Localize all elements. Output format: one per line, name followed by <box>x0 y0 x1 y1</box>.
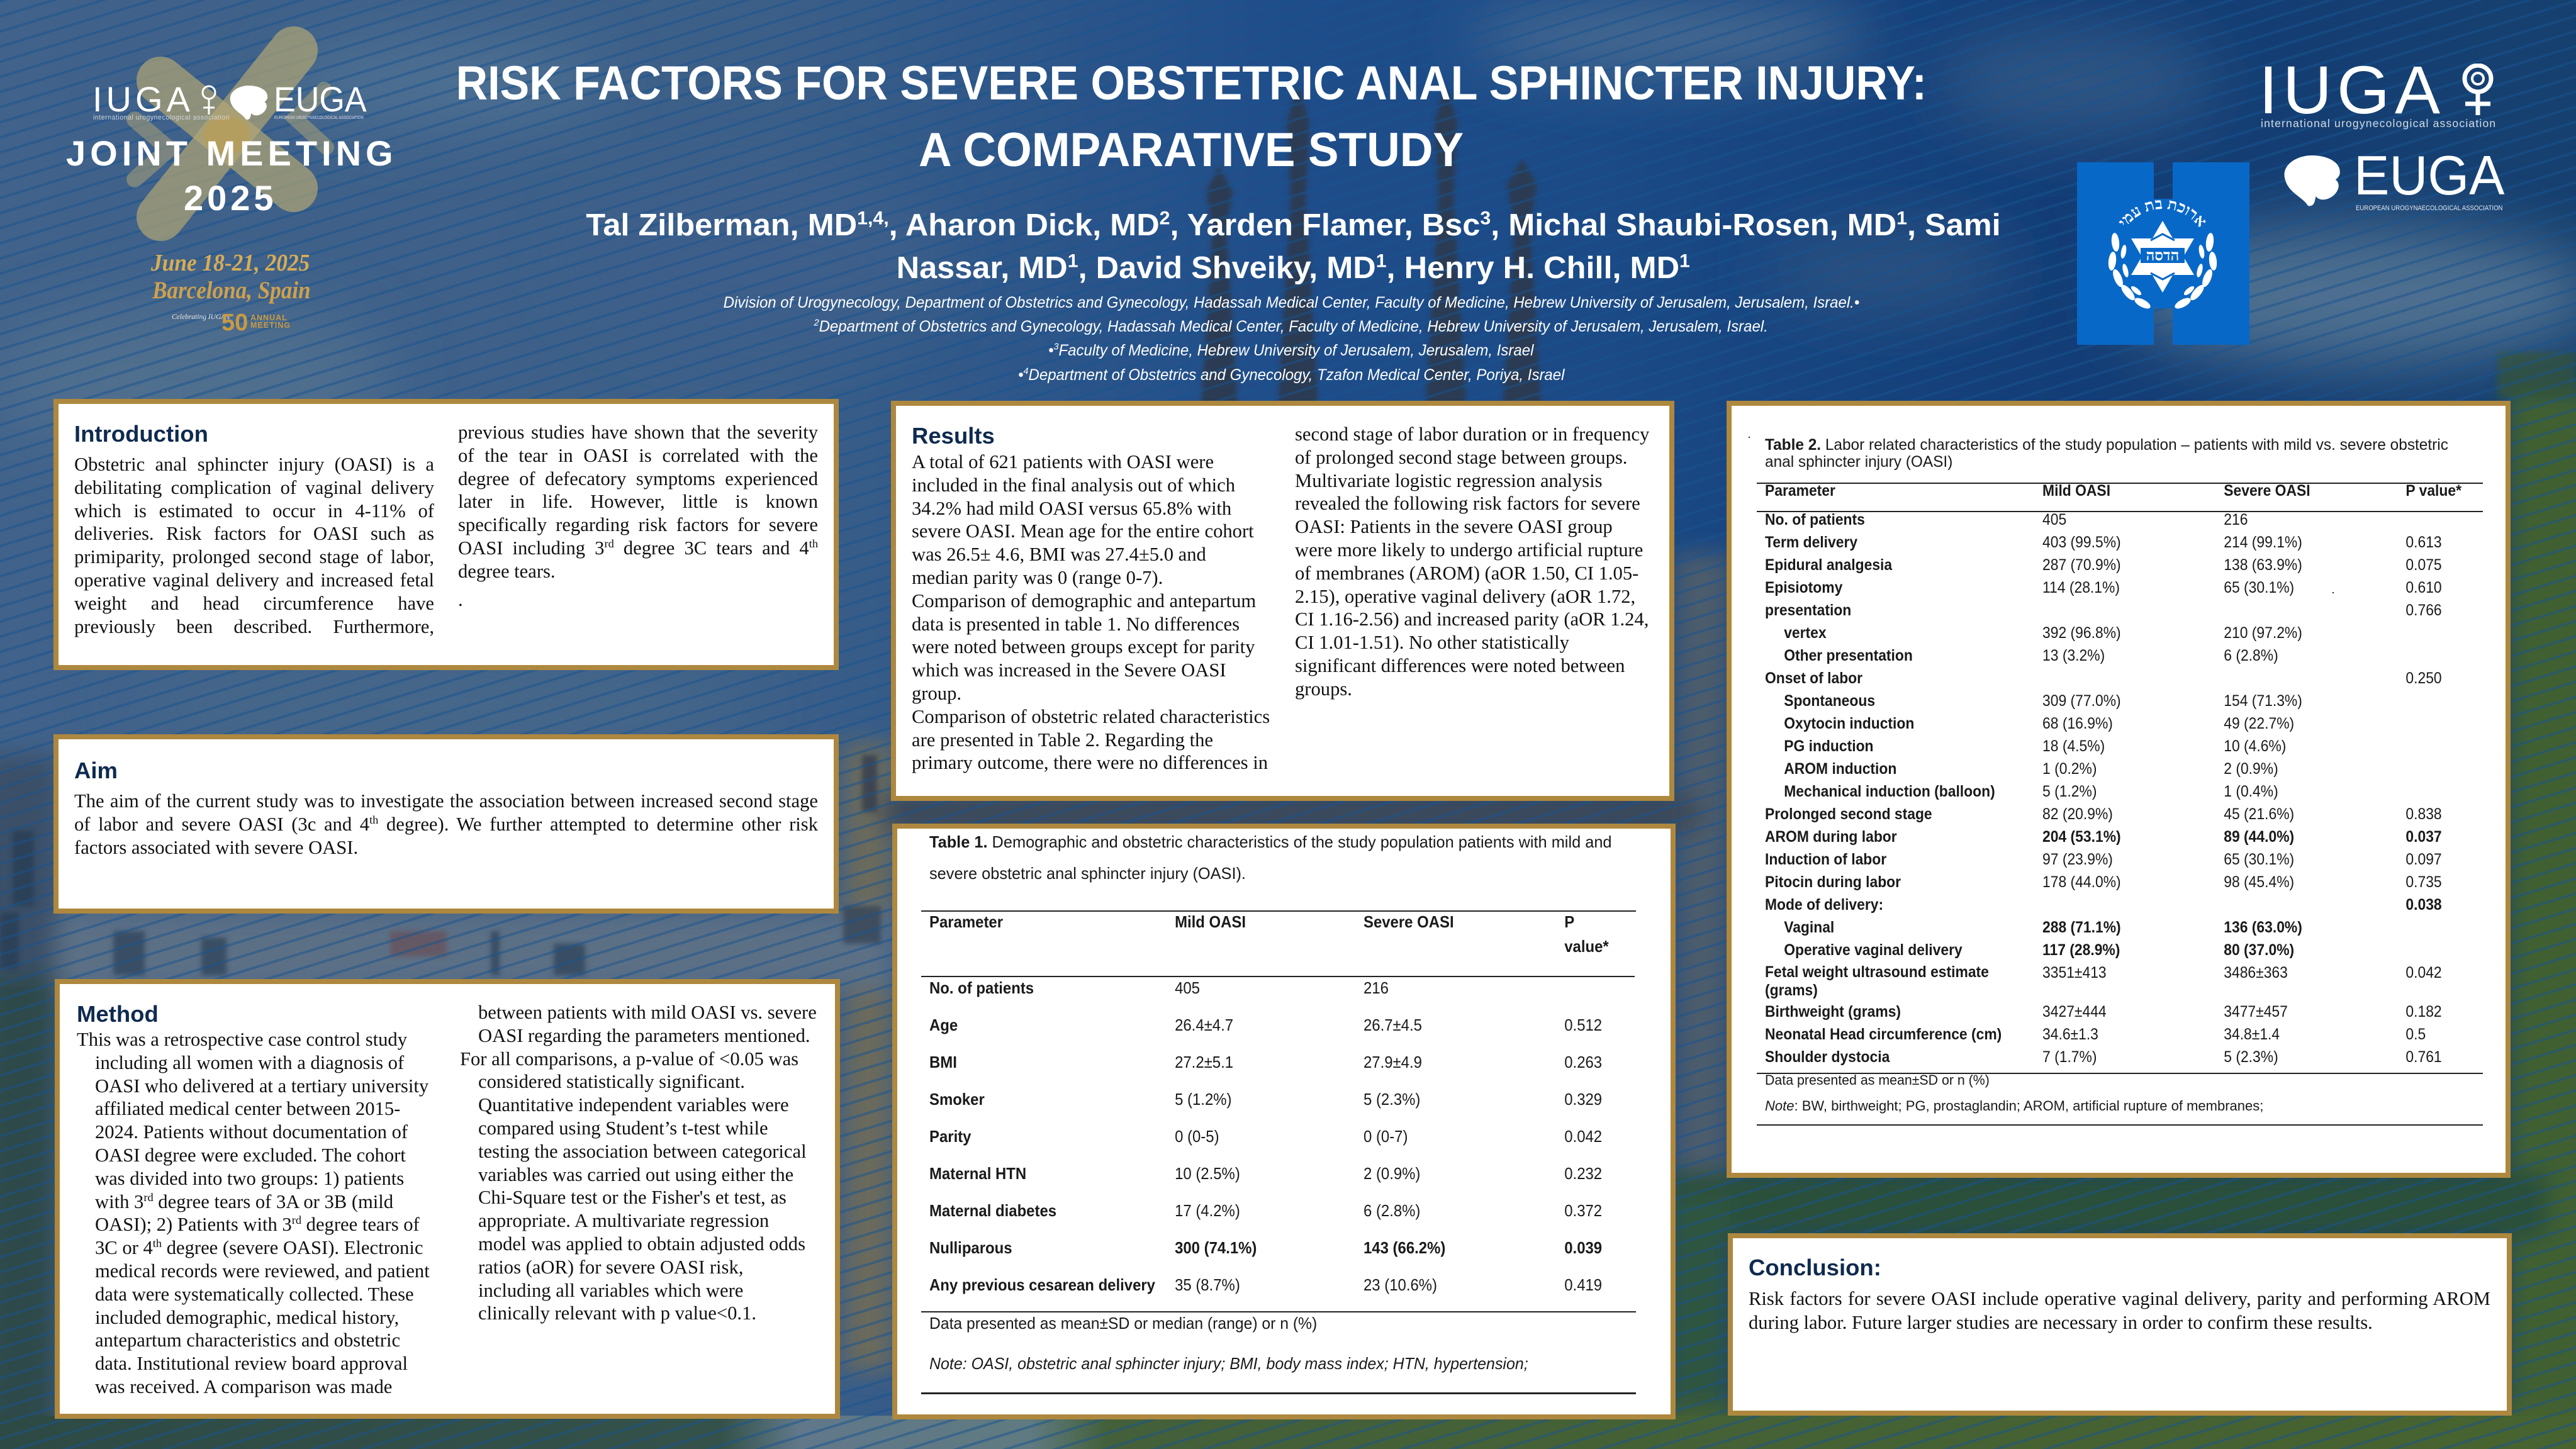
table 2 data: AROM during labor <box>1765 828 1897 846</box>
text: results column 2: CI 1.16-2.56) and increased parity (aOR 1.24, <box>1295 608 1649 630</box>
text: introduction column 2: degree of defecatory symptoms experienced <box>458 468 818 490</box>
table 2 data: 98 (45.4%) <box>2224 873 2294 891</box>
lower buildings and greenery <box>0 390 2576 1449</box>
logo: IUGA EUGA joint meeting <box>66 26 398 336</box>
table 2 data: P value* <box>2405 482 2461 500</box>
affiliations: Division of Urogynecology, Department of Obstetrics and Gynecology, Hadassah Medical Center, Faculty of Medicine, Hebrew University of Jerusalem, Jerusalem, Israel.• <box>723 294 1859 311</box>
table 2 data <box>1765 479 2486 1068</box>
table 2 data: 0.735 <box>2405 873 2442 891</box>
text: introduction column 1: operative vaginal delivery and increased fetal <box>74 569 434 591</box>
table 2 data: 0.182 <box>2405 1003 2442 1021</box>
table 1 data note: Data presented as mean±SD or median (range) or n (%) <box>929 1314 1317 1333</box>
table 1 data: 0 (0-5) <box>1175 1127 1219 1146</box>
text: results column 1 <box>912 450 1277 775</box>
table 2 data: 3477±457 <box>2224 1003 2288 1021</box>
text: aim: factors associated with severe OASI. <box>74 837 358 858</box>
text: introduction column 2: degree tears. <box>458 561 556 582</box>
table 1 data: Parameter <box>929 912 1003 931</box>
text: method column 1: 2024. Patients without documentation of <box>95 1121 408 1143</box>
icon: EUGA organ blob <box>230 86 268 120</box>
table 1 data: Nulliparous <box>929 1238 1012 1257</box>
text: aim <box>74 790 818 859</box>
50 mark: 50 <box>221 310 248 336</box>
table 2 data: 34.8±1.4 <box>2224 1026 2280 1043</box>
table 2 data: No. of patients <box>1765 511 1865 529</box>
icon: venus symbol small <box>201 86 216 115</box>
logo caption: international urogynecological association: international urogynecological association <box>93 114 230 121</box>
text: results column 1: primary outcome, there were no differences in <box>912 752 1268 773</box>
table 2 data: Mode of delivery: <box>1765 896 1883 914</box>
table 2 data: 405 <box>2042 511 2066 529</box>
affiliations: 2Department of Obstetrics and Gynecology, Hadassah Medical Center, Faculty of Medicine, Hebrew University of Jerusalem, Jerusalem, Israel. <box>814 318 1768 335</box>
table 2 data: 82 (20.9%) <box>2042 805 2113 823</box>
table 1 data: P <box>1564 912 1574 931</box>
table 2 data: 216 <box>2224 511 2248 529</box>
table 1 data: Age <box>929 1015 958 1034</box>
table 2 data: Fetal weight ultrasound estimate <box>1765 963 1989 981</box>
table 2 data: Severe OASI <box>2224 482 2310 500</box>
text: method column 2: variables was carried out using either the <box>478 1164 793 1185</box>
text: aim: The aim of the current study was to investigate the association between increased second stage <box>74 790 818 812</box>
panel: aim <box>53 734 839 914</box>
table 2 data: 65 (30.1%) <box>2224 579 2294 596</box>
table 2 data: 0.761 <box>2405 1048 2442 1066</box>
table 1 data: 143 (66.2%) <box>1364 1238 1445 1257</box>
table 1 data: 10 (2.5%) <box>1175 1164 1240 1183</box>
table 2 data: 3351±413 <box>2042 964 2107 982</box>
text: method column 1 <box>77 1028 442 1399</box>
text: results column 1: were noted between groups except for parity <box>912 636 1255 657</box>
table 2 data: 49 (22.7%) <box>2224 715 2294 732</box>
text: results column 2 <box>1295 423 1660 701</box>
text: conclusion: Risk factors for severe OASI include operative vaginal delivery, parity and performing AROM <box>1749 1288 2490 1309</box>
text: introduction column 2: specifically regarding risk factors for severe <box>458 514 818 535</box>
table 2 data: vertex <box>1784 624 1827 642</box>
table 1 data: 216 <box>1364 978 1389 997</box>
table 2 data: 68 (16.9%) <box>2042 715 2113 732</box>
table 2 data: 0.610 <box>2405 579 2442 596</box>
table 2 data: 114 (28.1%) <box>2042 579 2120 596</box>
table 2 data: AROM induction <box>1784 760 1896 778</box>
table 2 data: 65 (30.1%) <box>2224 851 2294 868</box>
table 2 data: 210 (97.2%) <box>2224 624 2302 642</box>
text: method column 2: model was applied to obtain adjusted odds <box>478 1233 805 1255</box>
table 1 data: Parity <box>929 1127 971 1146</box>
text: introduction column 2 <box>458 421 818 611</box>
table 2 data: Oxytocin induction <box>1784 715 1914 732</box>
affiliations <box>723 294 1859 384</box>
text: conclusion: during labor. Future larger studies are necessary in order to confirm these results. <box>1749 1312 2373 1333</box>
text: introduction column 1: weight and head circumference have <box>74 593 434 614</box>
heading: conclusion: Conclusion: <box>1749 1255 1881 1280</box>
table 2 data: Induction of labor <box>1765 851 1886 868</box>
text: results column 1: 34.2% had mild OASI versus 65.8% with <box>912 498 1231 519</box>
title: A COMPARATIVE STUDY <box>919 123 1464 177</box>
table 2 caption: Table 2. Labor related characteristics of the study population – patients with mild vs. severe obstetric <box>1765 436 2448 454</box>
table 2 data: 214 (99.1%) <box>2224 534 2302 551</box>
logo text: IUGA: IUGA <box>92 79 194 119</box>
table 2 data: 80 (37.0%) <box>2224 941 2294 959</box>
logo caption: EUROPEAN UROGYNAECOLOGICAL ASSOCIATION <box>2356 204 2502 212</box>
table 1 data: 26.4±4.7 <box>1175 1015 1233 1034</box>
text: results column 2: revealed the following risk factors for severe <box>1295 493 1640 514</box>
text: introduction column 2: OASI including 3rd degree 3C tears and 4th <box>458 537 818 559</box>
table 1 data: No. of patients <box>929 978 1034 997</box>
panel: results <box>891 401 1674 801</box>
text: results column 2: Multivariate logistic regression analysis <box>1295 470 1603 491</box>
text: method column 2: considered statistically significant. <box>478 1071 745 1092</box>
table 2 abbreviations note: Note: BW, birthweight; PG, prostaglandin; AROM, artificial rupture of membranes; <box>1765 1098 2263 1114</box>
table 2 data: 13 (3.2%) <box>2042 647 2105 664</box>
text: results column 1: group. <box>912 683 961 704</box>
text: method column 1: was received. A comparison was made <box>95 1376 392 1397</box>
table 2 data: 403 (99.5%) <box>2042 534 2121 551</box>
table 1 data: Maternal diabetes <box>929 1201 1056 1220</box>
table 1 data: 0 (0-7) <box>1364 1127 1408 1146</box>
table 2 data: 154 (71.3%) <box>2224 692 2302 710</box>
anniversary caption: Celebrating IUGA's <box>172 313 230 321</box>
table 2 data: Vaginal <box>1784 919 1834 936</box>
table 2 data: Neonatal Head circumference (cm) <box>1765 1026 2002 1043</box>
table 2 data: 0.038 <box>2405 896 2442 914</box>
table 1 data: 405 <box>1175 978 1200 997</box>
text: results column 1: included in the final analysis out of which <box>912 474 1235 496</box>
table 2 data: 0.037 <box>2405 828 2442 846</box>
text: introduction column 1: which is estimated to occur in 4-11% of <box>74 500 434 522</box>
table 1 data: 6 (2.8%) <box>1364 1201 1420 1220</box>
table 1 data: 0.512 <box>1564 1015 1602 1034</box>
text: introduction column 1: previously been described. Furthermore, <box>74 616 434 637</box>
table 2 data: 1 (0.4%) <box>2224 783 2278 800</box>
text: results column 2: significant differences were noted between <box>1295 655 1625 676</box>
table 2 caption <box>1765 437 2448 471</box>
text: method column 1: affiliated medical center between 2015- <box>95 1098 400 1119</box>
text: results column 1: Comparison of obstetric related characteristics <box>912 706 1270 727</box>
table 2 data: 45 (21.6%) <box>2224 805 2294 823</box>
logo: Hadassah <box>2077 162 2249 345</box>
table 2 data: presentation <box>1765 601 1851 619</box>
authors <box>586 208 2000 285</box>
table 1 data: Maternal HTN <box>929 1164 1026 1183</box>
table 2 data: (grams) <box>1765 982 1818 999</box>
text: method column 1: OASI who delivered at a tertiary university <box>95 1075 428 1097</box>
logo: EUGA top right <box>2284 144 2504 212</box>
table 1 data: 5 (1.2%) <box>1175 1090 1231 1109</box>
table 2 data note: Data presented as mean±SD or n (%) <box>1765 1072 1990 1088</box>
text: method column 1: medical records were reviewed, and patient <box>95 1260 430 1282</box>
text: aim: of labor and severe OASI (3c and 4th degree). We further attempted to determine other risk <box>74 814 818 835</box>
authors: Nassar, MD1, David Shveiky, MD1, Henry H. Chill, MD1 <box>896 251 1690 285</box>
text: introduction column 2: previous studies have shown that the severity <box>458 422 818 443</box>
table 1 data: 2 (0.9%) <box>1364 1164 1420 1183</box>
text: method column 2: Chi-Square test or the Fisher's et test, as <box>478 1187 787 1208</box>
table 2 data: 0.766 <box>2405 601 2442 619</box>
table 1 data: BMI <box>929 1053 957 1071</box>
table 1 data: 35 (8.7%) <box>1175 1275 1240 1294</box>
text: method column 1: was divided into two groups: 1) patients <box>95 1168 404 1189</box>
table 2 data: 10 (4.6%) <box>2224 737 2286 755</box>
heading: joint meeting: JOINT MEETING <box>66 133 398 173</box>
stray dots <box>1749 437 1750 438</box>
table 1 data <box>929 910 1622 1304</box>
table 1 caption: Table 1. Demographic and obstetric characteristics of the study population patients with mild and <box>929 832 1612 851</box>
text: method column 1: data were systematically collected. These <box>95 1284 414 1305</box>
text: results column 2: of prolonged second stage between groups. <box>1295 447 1627 468</box>
table 2 data: 117 (28.9%) <box>2042 941 2120 959</box>
logo: IUGA top right <box>2259 52 2496 130</box>
table 2 data: Episiotomy <box>1765 579 1842 596</box>
table 2 data: 0.5 <box>2405 1026 2426 1043</box>
text: method column 2: testing the association between categorical <box>478 1141 807 1162</box>
text: conclusion <box>1749 1287 2490 1334</box>
text: results column 1: are presented in Table 2. Regarding the <box>912 729 1213 751</box>
logo text: IUGA: IUGA <box>2259 52 2445 128</box>
table 1 data: 0.329 <box>1564 1090 1602 1109</box>
panel: method <box>55 979 840 1419</box>
table 2 data: 178 (44.0%) <box>2042 873 2121 891</box>
text: results column 1: median parity was 0 (range 0-7). <box>912 567 1163 588</box>
text: introduction column 2: later in life. However, little is known <box>458 491 818 512</box>
table 1 data: Any previous cesarean delivery <box>929 1275 1155 1294</box>
text: introduction column 2: . <box>458 589 463 610</box>
text: method column 2: between patients with mild OASI vs. severe <box>478 1002 817 1023</box>
table 2 data: Other presentation <box>1784 647 1913 664</box>
panel: table 1 <box>892 824 1676 1419</box>
text: results column 2: OASI: Patients in the severe OASI group <box>1295 516 1613 537</box>
table 2 data: 6 (2.8%) <box>2224 647 2278 664</box>
logo caption: European urogynaecological association: EUROPEAN UROGYNAECOLOGICAL ASSOCIATION <box>274 116 364 120</box>
text: results column 2: CI 1.01-1.51). No other statistically <box>1295 632 1569 653</box>
table 2 data: 89 (44.0%) <box>2224 828 2294 846</box>
text: results column 2: were more likely to undergo artificial rupture <box>1295 539 1643 561</box>
text: method column 2: ratios (aOR) for severe OASI risk, <box>478 1256 743 1278</box>
text: introduction column 1 <box>74 453 434 638</box>
table 2 data: 7 (1.7%) <box>2042 1048 2097 1066</box>
title <box>456 57 1927 177</box>
text: results column 2: groups. <box>1295 678 1352 700</box>
text: introduction column 1: debilitating complication of vaginal delivery <box>74 477 434 498</box>
icon: gold X emblem <box>126 26 334 241</box>
emblem: הדסה <box>2146 248 2179 264</box>
table 2 data: 34.6±1.3 <box>2042 1026 2098 1043</box>
table 2 data: Onset of labor <box>1765 669 1862 687</box>
heading: introduction: Introduction <box>74 421 208 447</box>
table 2 data: 136 (63.0%) <box>2224 919 2302 936</box>
icon: organ blob <box>2283 155 2344 210</box>
text: method column 2: including all variables which were <box>478 1280 743 1301</box>
text: method column 1: included demographic, medical history, <box>95 1307 399 1328</box>
text: results column 2: of membranes (AROM) (aOR 1.50, CI 1.05- <box>1295 562 1638 584</box>
table 1 data: 0.263 <box>1564 1053 1602 1071</box>
table 1 data: 26.7±4.5 <box>1364 1015 1422 1034</box>
text: method column 2: appropriate. A multivariate regression <box>478 1210 769 1231</box>
annual meeting: ANNUAL <box>250 313 288 322</box>
table 2 data: 287 (70.9%) <box>2042 556 2121 574</box>
affiliations: •4Department of Obstetrics and Gynecology, Tzafon Medical Center, Poriya, Israel <box>1018 366 1564 384</box>
date: June 18-21, 2025 <box>151 250 310 276</box>
table 1 data: 27.2±5.1 <box>1175 1053 1233 1071</box>
table 2 data: 0.042 <box>2405 964 2442 982</box>
table 2 data: Term delivery <box>1765 534 1857 551</box>
table 1 caption <box>929 826 1612 889</box>
table 2 data: 3486±363 <box>2224 964 2288 982</box>
heading: results: Results <box>912 423 995 449</box>
heading: aim: Aim <box>74 758 118 783</box>
table 2 data: Spontaneous <box>1784 692 1875 710</box>
text: results column 1: was 26.5± 4.6, BMI was 27.4±5.0 and <box>912 544 1206 565</box>
heading: method: Method <box>77 1001 159 1027</box>
table 2 data: Shoulder dystocia <box>1765 1048 1890 1066</box>
table 1 data: 300 (74.1%) <box>1175 1238 1257 1257</box>
table 1 data: Mild OASI <box>1175 912 1246 931</box>
text: method column 1: data. Institutional review board approval <box>95 1353 408 1374</box>
text: method column 1: 3C or 4th degree (severe OASI). Electronic <box>95 1237 423 1258</box>
table 1 data: 5 (2.3%) <box>1364 1090 1420 1109</box>
table 2 data: 3427±444 <box>2042 1003 2107 1021</box>
text: results column 1: which was increased in the Severe OASI <box>912 659 1226 681</box>
annual meeting <box>250 313 291 330</box>
text: introduction column 1: deliveries. Risk factors for OASI such as <box>74 523 434 544</box>
table 1 data: Smoker <box>929 1090 985 1109</box>
text: method column 1: with 3rd degree tears of 3A or 3B (mild <box>95 1190 393 1212</box>
emblem: ארוכת בת עמי <box>2119 200 2206 227</box>
table 2 data: 0.097 <box>2405 851 2442 868</box>
table 1 data: 0.039 <box>1564 1238 1602 1257</box>
text: method column 2 <box>460 1001 825 1325</box>
table 1 caption: severe obstetric anal sphincter injury (OASI). <box>929 864 1246 883</box>
text: results column 2: second stage of labor duration or in frequency <box>1295 423 1649 445</box>
text: method column 2: Quantitative independent variables were <box>478 1094 789 1116</box>
panel: table 2 <box>1727 401 2511 1178</box>
text: method column 1: including all women with a diagnosis of <box>95 1052 404 1073</box>
logo text: EUGA: EUGA <box>274 79 367 119</box>
place: Barcelona, Spain <box>152 277 311 304</box>
towers <box>1201 84 1541 405</box>
table 1 data: 0.042 <box>1564 1127 1602 1146</box>
logo text: EUGA: EUGA <box>2354 144 2504 206</box>
authors: Tal Zilberman, MD1,4,, Aharon Dick, MD2, Yarden Flamer, Bsc3, Michal Shaubi-Rosen, MD1, Sami <box>586 208 2000 242</box>
text: method column 2: compared using Student’s t-test while <box>478 1117 768 1139</box>
annual meeting: MEETING <box>250 321 291 330</box>
table 1 data: value* <box>1564 937 1609 956</box>
table 2 data: 5 (2.3%) <box>2224 1048 2278 1066</box>
table 2 data: Prolonged second stage <box>1765 805 1932 823</box>
icon: venus symbol <box>2463 64 2493 115</box>
table 2 data: 392 (96.8%) <box>2042 624 2121 642</box>
H shape <box>2077 162 2249 345</box>
table 2 data: 0.613 <box>2405 534 2442 551</box>
table 2 data: 138 (63.9%) <box>2224 556 2302 574</box>
table 2 data: Operative vaginal delivery <box>1784 941 1963 959</box>
table 2 data: 204 (53.1%) <box>2042 828 2121 846</box>
text: method column 1: OASI degree were excluded. The cohort <box>95 1144 406 1166</box>
panel: conclusion <box>1728 1233 2512 1416</box>
table 2 data: 0.075 <box>2405 556 2442 574</box>
table 2 data: 2 (0.9%) <box>2224 760 2278 778</box>
table 2 data: 0.250 <box>2405 669 2442 687</box>
text: method column 1: This was a retrospective case control study <box>77 1029 407 1050</box>
title: RISK FACTORS FOR SEVERE OBSTETRIC ANAL SPHINCTER INJURY: <box>456 57 1927 110</box>
heading: 2025: 2025 <box>184 178 277 218</box>
table 1 data: Severe OASI <box>1364 912 1454 931</box>
table 2 data: 0.838 <box>2405 805 2442 823</box>
text: results column 1: data is presented in table 1. No differences <box>912 613 1240 635</box>
table 1 data: 23 (10.6%) <box>1364 1275 1437 1294</box>
table 1 data: 0.372 <box>1564 1201 1602 1220</box>
text: introduction column 1: primiparity, prolonged second stage of labor, <box>74 546 434 568</box>
text: method column 1: antepartum characteristics and obstetric <box>95 1329 400 1351</box>
table 2 data: 288 (71.1%) <box>2042 919 2121 936</box>
table 1 data: 17 (4.2%) <box>1175 1201 1240 1220</box>
affiliations: •3Faculty of Medicine, Hebrew University of Jerusalem, Jerusalem, Israel <box>1048 342 1534 359</box>
text: method column 2: clinically relevant with p value<0.1. <box>478 1302 756 1324</box>
table 2 data: Birthweight (grams) <box>1765 1003 1901 1021</box>
table 2 data: 1 (0.2%) <box>2042 760 2097 778</box>
text: results column 1: A total of 621 patients with OASI were <box>912 451 1214 473</box>
text: results column 1: severe OASI. Mean age for the entire cohort <box>912 520 1254 542</box>
text: introduction column 1: Obstetric anal sphincter injury (OASI) is a <box>74 454 434 475</box>
table 2 data: Pitocin during labor <box>1765 873 1901 891</box>
table 2 data: Parameter <box>1765 482 1835 500</box>
table 2 data: 309 (77.0%) <box>2042 692 2121 710</box>
text: results column 2: 2.15), operative vaginal delivery (aOR 1.72, <box>1295 586 1635 607</box>
text: method column 1: OASI); 2) Patients with 3rd degree tears of <box>95 1214 420 1235</box>
table 2 data: Epidural analgesia <box>1765 556 1892 574</box>
table 1 data: 0.419 <box>1564 1275 1602 1294</box>
emblem <box>2107 196 2218 311</box>
table 2 data: 5 (1.2%) <box>2042 783 2097 800</box>
text: introduction column 2: of the tear in OASI is correlated with the <box>458 445 818 466</box>
panel: introduction <box>53 399 839 670</box>
table 2 data: Mechanical induction (balloon) <box>1784 783 1995 800</box>
table 2 data: 18 (4.5%) <box>2042 737 2105 755</box>
table 1 abbreviations note: Note: OASI, obstetric anal sphincter injury; BMI, body mass index; HTN, hypertension; <box>929 1354 1528 1373</box>
table 2 caption: anal sphincter injury (OASI) <box>1765 453 1952 471</box>
table 2 data: Mild OASI <box>2042 482 2110 500</box>
text: method column 2: OASI regarding the parameters mentioned. <box>478 1025 810 1046</box>
text: method column 2: For all comparisons, a p-value of <0.05 was <box>460 1048 798 1070</box>
table 2 data: 97 (23.9%) <box>2042 851 2113 868</box>
table 1 data: 0.232 <box>1564 1164 1602 1183</box>
table 2 data: PG induction <box>1784 737 1874 755</box>
table 1 data: 27.9±4.9 <box>1364 1053 1422 1071</box>
text: results column 1: Comparison of demographic and antepartum <box>912 590 1256 612</box>
logo caption: international urogynecological association <box>2261 117 2496 130</box>
